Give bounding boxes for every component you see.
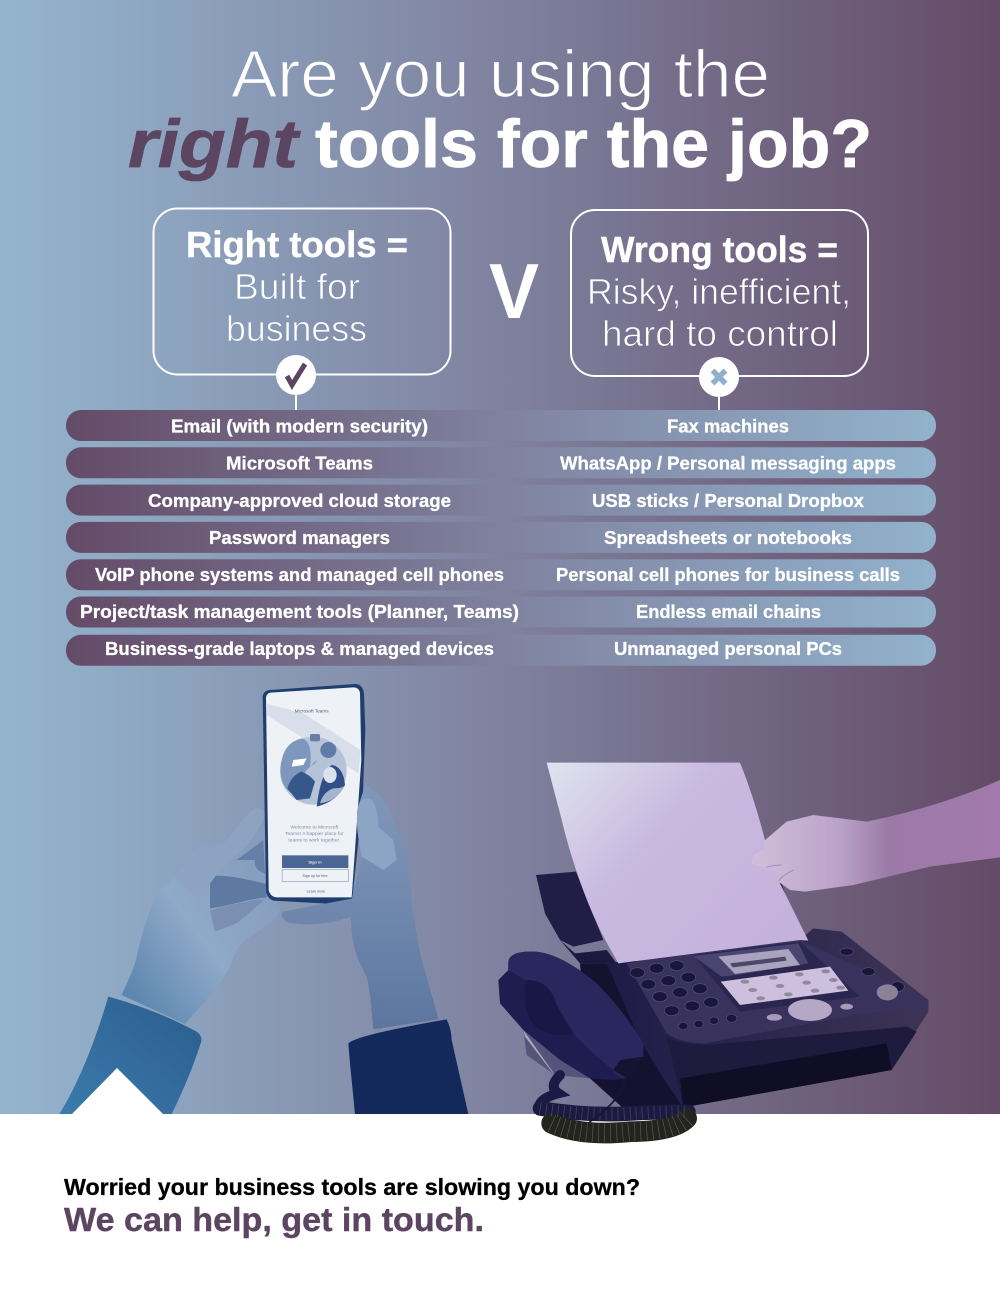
list: right tools: Microsoft Teams <box>226 454 373 474</box>
panel: right tools: business <box>226 308 367 349</box>
list: wrong tools: WhatsApp / Personal messaging apps <box>560 454 896 474</box>
fax buttons <box>630 948 904 1030</box>
list: right tools: VoIP phone systems and managed cell phones <box>95 565 504 585</box>
call to action <box>64 1174 640 1238</box>
list: wrong tools: Unmanaged personal PCs <box>614 639 842 659</box>
versus mark: V <box>489 247 539 335</box>
fax base under handset <box>580 963 683 1108</box>
list: wrong tools: Personal cell phones for business calls <box>556 565 900 585</box>
illustration: fax machine <box>498 763 1000 1133</box>
illustration: hands holding phone <box>59 684 468 1114</box>
comparison bars <box>66 410 936 666</box>
panel: right tools: Built for <box>234 266 360 307</box>
coiled cord <box>538 1070 688 1133</box>
list: wrong tools: Endless email chains <box>636 602 821 622</box>
call to action: We can help, get in touch. <box>64 1201 484 1238</box>
list: wrong tools: Fax machines <box>667 416 789 436</box>
phone: Sign in <box>308 859 322 864</box>
list: wrong tools: USB sticks / Personal Dropbox <box>592 491 864 511</box>
phone: Welcome to Microsoft <box>290 824 339 830</box>
call to action: Worried your business tools are slowing you down? <box>64 1174 640 1200</box>
panel: wrong tools: Wrong tools = <box>601 229 838 270</box>
phone: Microsoft Teams <box>295 709 329 715</box>
title <box>128 37 872 182</box>
title: tools for the job? <box>315 106 872 182</box>
panel: right tools: Right tools = <box>186 224 408 265</box>
phone <box>263 684 365 905</box>
list: right tools: Business-grade laptops & managed devices <box>105 639 494 659</box>
panel: wrong tools <box>571 210 868 410</box>
list: wrong tools: Spreadsheets or notebooks <box>604 528 852 548</box>
telephone handset <box>498 952 643 1080</box>
title: Are you using the <box>231 37 770 112</box>
panel: right tools <box>154 208 450 410</box>
fax body <box>607 928 928 1107</box>
paper sheet <box>547 763 808 963</box>
list: right tools: Company-approved cloud storage <box>148 491 451 511</box>
white notch <box>72 1068 163 1114</box>
white footer panel <box>0 1114 1000 1294</box>
phone: Sign up for free <box>302 874 327 878</box>
title: right <box>128 106 301 182</box>
panel: wrong tools: hard to control <box>602 313 838 354</box>
list: wrong tools <box>556 416 900 659</box>
list: right tools: Password managers <box>209 528 390 548</box>
phone: teams to work together. <box>288 837 340 843</box>
list: right tools: Email (with modern security) <box>171 416 428 436</box>
list: right tools: Project/task management tools (Planner, Teams) <box>80 602 519 622</box>
panel: wrong tools: Risky, inefficient, <box>587 271 851 312</box>
arm and hand <box>752 780 1000 892</box>
list: right tools <box>80 416 519 659</box>
phone: Teams! A happier place for <box>285 831 344 837</box>
fax paper tray <box>536 872 603 947</box>
phone: Learn more <box>307 890 325 894</box>
